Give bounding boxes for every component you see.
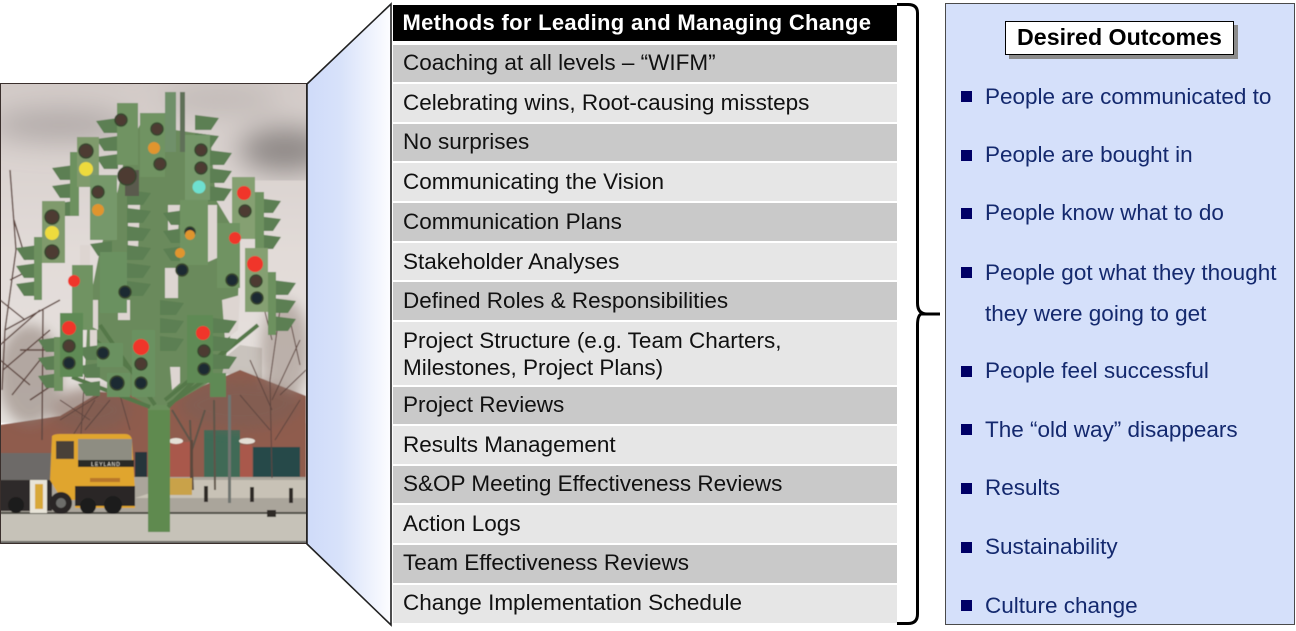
method 4: Communicating the Vision [403, 169, 664, 194]
photo: traffic light tree [0, 83, 307, 544]
outcome 3: People know what to do [985, 200, 1224, 225]
outcome 7: Results [985, 475, 1060, 500]
sky [0, 83, 307, 423]
method 10: Results Management [403, 432, 616, 457]
outcome bullet 7 [961, 483, 972, 494]
traffic light housings [42, 103, 268, 397]
sky gaps in canopy [80, 205, 240, 390]
outcome bullet 9 [961, 600, 972, 611]
method 5 [393, 203, 897, 241]
outcome 1: People are communicated to [985, 84, 1271, 109]
method 14 [393, 585, 897, 623]
method 12 [393, 505, 897, 543]
plaza and road [0, 477, 307, 514]
truck [0, 434, 135, 514]
method 2: Celebrating wins, Root-causing missteps [403, 90, 809, 115]
outcome 6: The “old way” disappears [985, 417, 1238, 442]
building [0, 345, 306, 492]
lamps [45, 114, 263, 390]
table heading: Methods for Leading and Managing Change [402, 10, 871, 35]
desired outcomes heading [1005, 21, 1234, 55]
method 6: Stakeholder Analyses [403, 249, 619, 274]
outcome 4 [985, 260, 1276, 326]
method 12: Action Logs [403, 511, 521, 536]
method 10 [393, 426, 897, 464]
method 7: Defined Roles & Responsibilities [403, 288, 728, 313]
louvered backs [16, 115, 296, 396]
outcome bullet 8 [961, 542, 972, 553]
method 2 [393, 84, 897, 122]
outcome bullet 5 [961, 366, 972, 377]
outcome bullet 6 [961, 424, 972, 435]
bollards [204, 486, 293, 517]
outcome bullet 1 [961, 91, 972, 102]
bracket [897, 3, 940, 625]
method 8 [393, 322, 897, 385]
method 1: Coaching at all levels – “WIFM” [403, 50, 716, 75]
method 3 [393, 124, 897, 161]
funnel connector from photo to methods list [306, 2, 392, 627]
outcome 5: People feel successful [985, 358, 1209, 383]
trunk and branches [72, 92, 258, 532]
method 4 [393, 163, 897, 201]
panel: desired outcomes [945, 3, 1295, 625]
method 8: Project Structure (e.g. Team Charters, [403, 328, 781, 353]
method 9 [393, 387, 897, 424]
outcome 2: People are bought in [985, 142, 1193, 167]
method 9: Project Reviews [403, 392, 564, 417]
desired outcomes heading: Desired Outcomes [1017, 24, 1222, 50]
outcome bullet 3 [961, 208, 972, 219]
method 14: Change Implementation Schedule [403, 590, 742, 615]
method 7 [393, 282, 897, 320]
method 11: S&OP Meeting Effectiveness Reviews [403, 471, 782, 496]
method 6 [393, 243, 897, 280]
outcome 9: Culture change [985, 593, 1138, 618]
method 8: Milestones, Project Plans) [403, 355, 663, 380]
method 13 [393, 545, 897, 583]
bare trees [0, 300, 309, 432]
method 5: Communication Plans [403, 209, 622, 234]
table heading [393, 5, 897, 41]
outcome 4: People got what they thought [985, 260, 1276, 285]
outcome bullet 2 [961, 150, 972, 161]
outcome 4: they were going to get [985, 301, 1206, 326]
methods table [393, 5, 897, 623]
method 1 [393, 45, 897, 82]
method 3: No surprises [403, 129, 529, 154]
method 11 [393, 466, 897, 503]
truck: LEYLAND [91, 462, 121, 468]
outcome 8: Sustainability [985, 534, 1118, 559]
outcome bullet 4 [961, 267, 972, 278]
method 13: Team Effectiveness Reviews [403, 550, 689, 575]
